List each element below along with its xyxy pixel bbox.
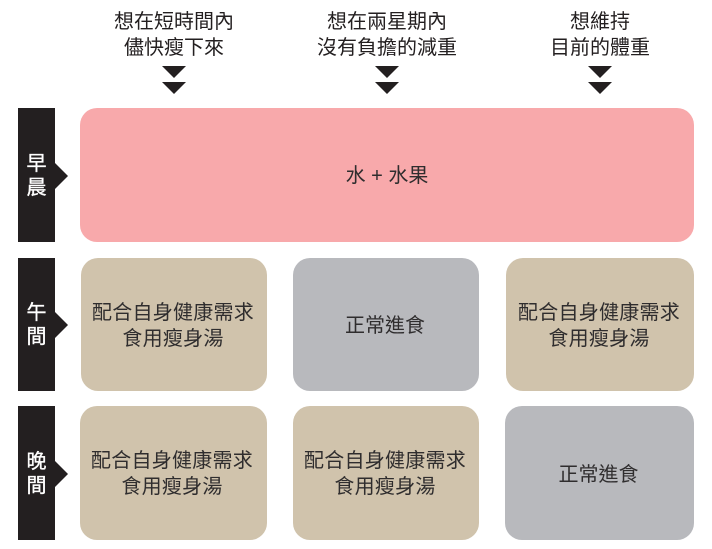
panel: noon, column 3: 食用瘦身湯 [548, 328, 650, 350]
heading: column 2: 沒有負擔的減重 [317, 37, 457, 59]
panel: evening, column 3 [505, 406, 694, 540]
panel: evening, column 1 [80, 406, 267, 540]
row label: evening: 間 [26, 475, 46, 497]
panel: evening, column 1: 配合自身健康需求 [91, 450, 253, 472]
panel: noon, column 2: 正常進食 [345, 314, 425, 336]
panel: evening, column 2: 食用瘦身湯 [334, 476, 436, 498]
row label: morning: 晨 [26, 177, 46, 199]
heading: column 3 [550, 11, 650, 59]
heading: column 1: 想在短時間內 [114, 11, 234, 33]
panel: noon, column 2 [293, 258, 479, 391]
row label: evening [18, 406, 68, 540]
row label: noon: 間 [26, 326, 46, 348]
arrow: column 1 [162, 66, 186, 94]
row label: morning [18, 108, 68, 242]
panel: morning, all columns: 水 + 水果 [346, 165, 428, 187]
heading: column 1: 儘快瘦下來 [124, 37, 224, 59]
panel: evening, column 1: 食用瘦身湯 [121, 476, 223, 498]
row label: noon: 午 [26, 302, 46, 324]
panel: evening, column 2 [293, 406, 479, 540]
panel: evening, column 3: 正常進食 [558, 464, 638, 486]
heading: column 3: 想維持 [570, 11, 630, 33]
arrow: column 2 [375, 66, 399, 94]
heading: column 2 [317, 11, 457, 59]
panel: noon, column 1: 配合自身健康需求 [92, 302, 254, 324]
arrow: column 3 [588, 66, 612, 94]
panel: evening, column 2: 配合自身健康需求 [304, 450, 466, 472]
row label: evening: 晚 [26, 451, 46, 473]
panel: noon, column 3 [506, 258, 694, 391]
panel: noon, column 1 [81, 258, 267, 391]
panel: morning, all columns [80, 108, 694, 242]
row label: morning: 早 [26, 153, 46, 175]
panel: noon, column 1: 食用瘦身湯 [122, 328, 224, 350]
heading: column 2: 想在兩星期內 [327, 11, 447, 33]
heading: column 3: 目前的體重 [550, 37, 650, 59]
row label: noon [18, 258, 68, 391]
panel: noon, column 3: 配合自身健康需求 [518, 302, 680, 324]
heading: column 1 [114, 11, 234, 59]
